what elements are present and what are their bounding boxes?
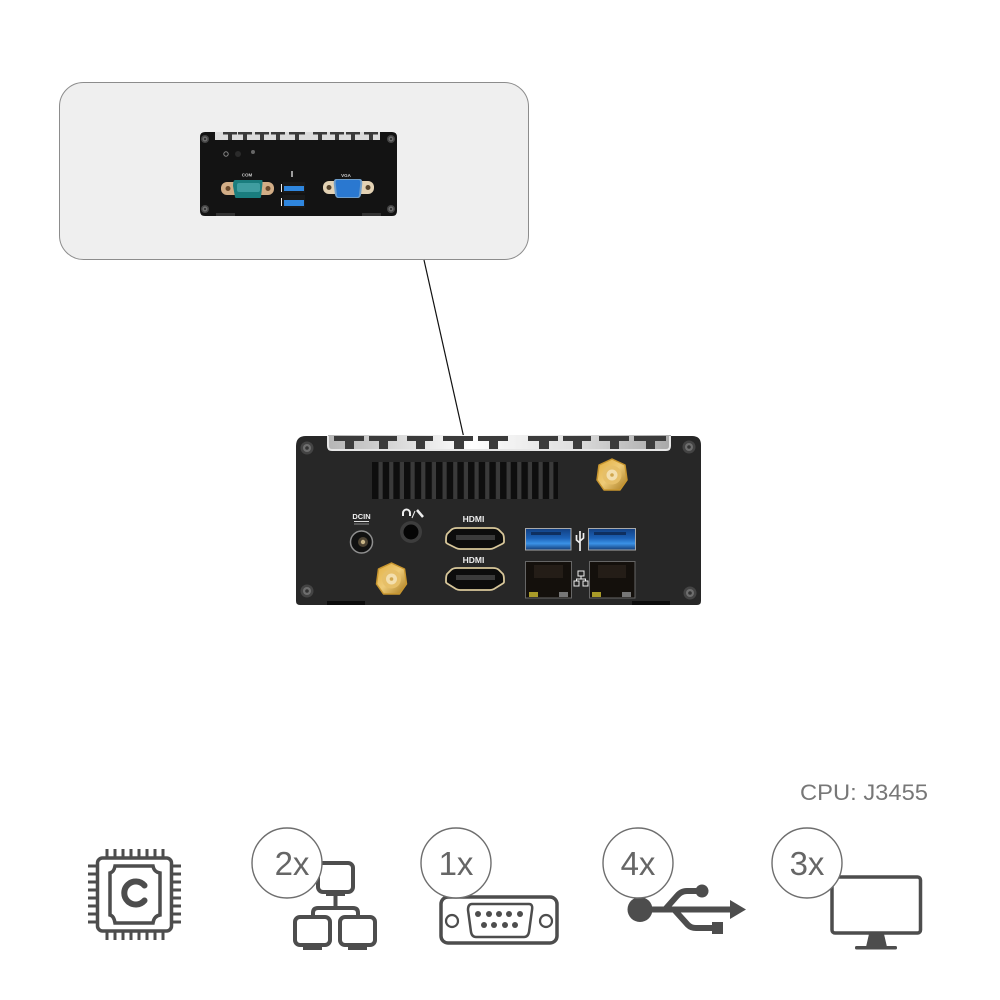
- icon: serial port with 1x badge: [421, 828, 557, 943]
- port: VGA: [323, 179, 374, 198]
- port: HDMI bottom: [446, 555, 504, 590]
- antenna connector: right: [597, 459, 627, 490]
- icon: CPU chip: [88, 849, 181, 940]
- label: VGA: VGA: [341, 173, 352, 178]
- chassis: [296, 436, 701, 605]
- port: USB pair: [281, 171, 305, 208]
- icon: monitor with 3x badge: [772, 828, 920, 950]
- port: HDMI top: [446, 514, 504, 549]
- port: LAN left: [526, 562, 572, 598]
- port: USB right: [588, 528, 636, 550]
- vent: [372, 462, 558, 499]
- port: LAN right: [590, 562, 635, 598]
- antenna connector: left: [376, 563, 406, 594]
- text: CPU model: CPU: J3455: [800, 780, 928, 805]
- port: COM serial: [221, 180, 274, 198]
- icon: USB with 4x badge: 4x: [621, 845, 656, 882]
- icon: LAN symbol: [574, 571, 588, 586]
- fins: [328, 435, 671, 449]
- port: HDMI bottom: HDMI: [463, 555, 484, 565]
- icon: serial port with 1x badge: 1x: [439, 845, 474, 882]
- device: front panel with COM, USB and VGA: [200, 132, 397, 216]
- screws: [300, 440, 696, 600]
- label: COM: COM: [242, 172, 252, 178]
- icon: monitor with 3x badge: 3x: [790, 845, 825, 882]
- connector line: [424, 260, 464, 436]
- port: USB left: [526, 528, 571, 550]
- icon: network with 2x badge: [252, 828, 375, 950]
- port: HDMI top: HDMI: [463, 514, 484, 524]
- port: DC in: [350, 512, 372, 553]
- icon: USB with 4x badge: [603, 828, 746, 934]
- port: DC in: DCIN: [352, 512, 371, 521]
- panel: side view callout: [60, 82, 528, 260]
- icon: USB symbol: [576, 531, 584, 551]
- device: rear panel: [296, 435, 701, 605]
- port: audio jack: [400, 510, 423, 543]
- icon: network with 2x badge: 2x: [275, 845, 310, 882]
